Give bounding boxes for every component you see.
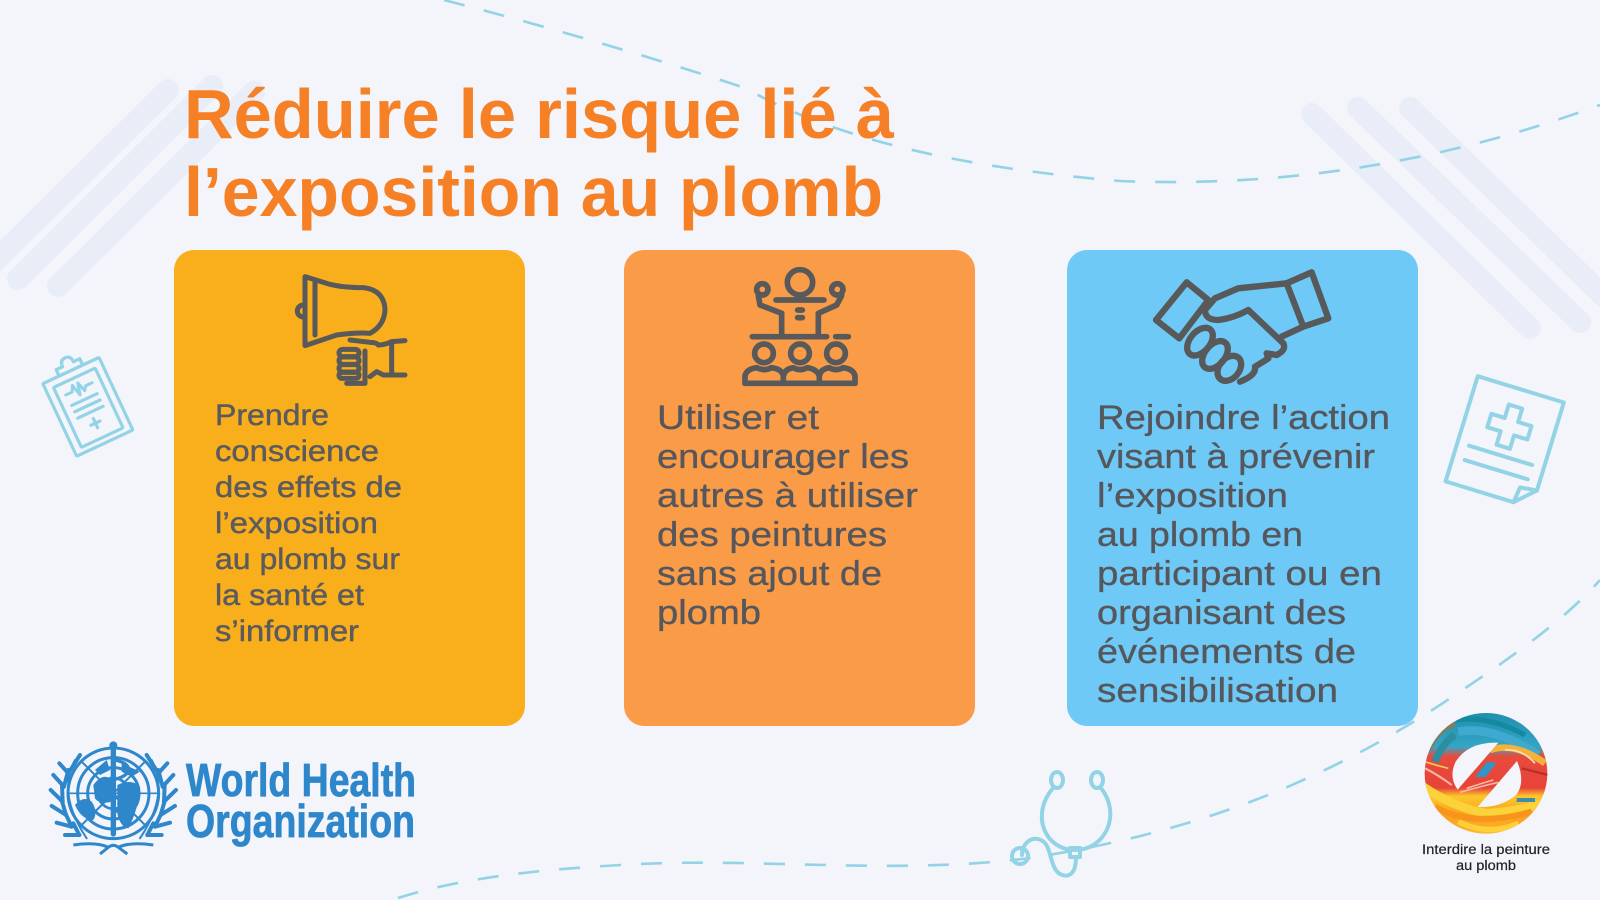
text: lead-free paint: autres à utiliser	[657, 477, 918, 515]
text: join the action: l’exposition	[1097, 477, 1288, 515]
title: l’exposition au plomb	[184, 153, 883, 231]
panel: join the action	[1067, 250, 1418, 726]
text: awareness: s’informer	[215, 615, 359, 648]
caption: Interdire la peinture	[1422, 842, 1550, 857]
wordmark: Organization	[186, 795, 415, 847]
text: awareness: l’exposition	[215, 507, 378, 540]
caption	[1422, 842, 1550, 873]
icon: clipboard	[37, 345, 133, 456]
wordmark	[186, 754, 416, 847]
icon: medical document	[1446, 376, 1564, 508]
emblem: paint ring with slash	[1423, 713, 1548, 834]
title: Réduire le risque lié à	[184, 75, 895, 153]
text: join the action: sensibilisation	[1097, 672, 1338, 710]
white crescents	[1452, 743, 1498, 790]
icon: stethoscope	[1012, 772, 1110, 876]
text: join the action: visant à prévenir	[1097, 438, 1375, 476]
logo: World Health Organization	[51, 741, 416, 854]
icon: megaphone	[297, 277, 405, 383]
text: lead-free paint: encourager les	[657, 438, 909, 476]
text: awareness	[215, 399, 402, 648]
emblem: UN wreath and staff	[51, 741, 176, 854]
icon: speaker and audience	[745, 270, 855, 383]
logo: ban lead paint	[1422, 713, 1550, 873]
panel: awareness	[174, 250, 525, 726]
text: awareness: des effets de	[215, 471, 402, 504]
text: lead-free paint: des peintures	[657, 516, 887, 554]
text: join the action: au plomb en	[1097, 516, 1303, 554]
text: join the action	[1097, 399, 1390, 710]
text: join the action: Rejoindre l’action	[1097, 399, 1390, 437]
wreath left	[51, 755, 87, 838]
title	[184, 75, 895, 231]
text: awareness: conscience	[215, 435, 379, 468]
wreath right	[140, 755, 176, 838]
text: awareness: au plomb sur	[215, 543, 400, 576]
text: lead-free paint: sans ajout de	[657, 555, 882, 593]
text: lead-free paint	[657, 399, 918, 632]
text: join the action: événements de	[1097, 633, 1356, 671]
text: awareness: la santé et	[215, 579, 365, 612]
icon: handshake	[1156, 272, 1328, 385]
caption: au plomb	[1456, 858, 1516, 873]
text: lead-free paint: plomb	[657, 594, 761, 632]
panel: lead-free paint	[624, 250, 975, 726]
text: awareness: Prendre	[215, 399, 329, 432]
text: join the action: participant ou en	[1097, 555, 1382, 593]
text: lead-free paint: Utiliser et	[657, 399, 820, 437]
text: join the action: organisant des	[1097, 594, 1346, 632]
wordmark: World Health	[186, 754, 416, 806]
